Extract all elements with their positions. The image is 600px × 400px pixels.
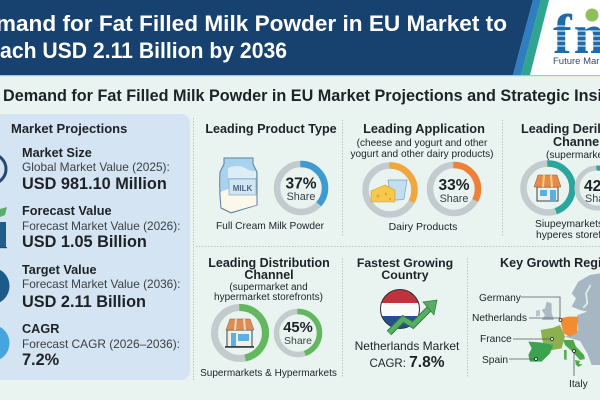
panel heading: Market Projections <box>11 121 127 136</box>
title <box>0 11 507 63</box>
caption: Dairy Products <box>389 221 457 233</box>
metric: CAGR <box>22 322 180 369</box>
heading: Fastest Growing <box>357 256 453 270</box>
donut chart: 33% share: 33% <box>438 177 470 194</box>
heading: Leading Application <box>363 121 485 136</box>
caption: Full Cream Milk Powder <box>216 221 325 232</box>
icon: market size ring <box>0 154 6 184</box>
donut chart: 42% share <box>577 168 600 208</box>
icon: store donut <box>524 164 572 212</box>
donut chart: 33% share <box>430 165 478 213</box>
metric: market size <box>22 146 170 193</box>
metric: target value <box>22 263 180 311</box>
metric: forecast value: Forecast Market Value (2026): <box>22 219 180 233</box>
caption: Netherlands Market <box>355 339 460 353</box>
panel: leading distribution channel <box>200 256 337 379</box>
label: Germany: Germany <box>479 293 522 304</box>
label: Italy: Italy <box>569 379 589 390</box>
icon: milk bag: MILK <box>233 184 252 193</box>
metric: target value: Target Value <box>22 263 97 277</box>
metric: market size: Global Market Value (2025): <box>22 160 170 174</box>
donut chart: 37% share: Share <box>287 191 315 203</box>
stat: CAGR 7.8%: CAGR: 7.8% <box>370 354 445 371</box>
metric: forecast value: Forecast Value <box>22 204 112 218</box>
donut chart: 37% share: 37% <box>285 176 317 192</box>
metric: CAGR: CAGR <box>22 322 59 336</box>
panel: leading product type <box>205 122 337 232</box>
metric: CAGR: 7.2% <box>22 351 60 369</box>
panel: leading application <box>350 121 494 233</box>
metric: CAGR: Forecast CAGR (2026–2036): <box>22 337 180 351</box>
donut chart: 45% share: Share <box>284 335 312 347</box>
metric: forecast value: USD 1.05 Billion <box>22 233 147 251</box>
metric: target value: Forecast Market Value (2036): <box>22 277 180 291</box>
metric: market size: USD 981.10 Million <box>22 175 167 193</box>
panel: fastest growing country: Country <box>381 268 429 282</box>
icon: target circle <box>0 268 10 304</box>
metric: market size: Market Size <box>22 146 92 160</box>
panel: fastest growing country <box>355 256 460 371</box>
heading: Leading Distribution <box>208 256 330 270</box>
label: Spain: Spain <box>482 355 508 366</box>
icon: CAGR circle <box>0 324 10 362</box>
callout lines <box>509 297 574 376</box>
callout markers <box>534 318 576 360</box>
panel: leading derived channel <box>521 122 600 241</box>
panel: leading application: yogurt and other dairy products) <box>350 149 494 160</box>
panel: market projections <box>0 114 190 380</box>
donut chart: 45% share: 45% <box>283 320 313 336</box>
metric: forecast value <box>22 204 180 251</box>
donut chart: 33% share: Share <box>440 193 468 205</box>
heading: Leading Product Type <box>205 122 337 136</box>
caption: Supermarkets & Hypermarkets <box>200 368 337 379</box>
panel: key growth regions <box>472 256 600 390</box>
description: (supermarket and <box>229 282 308 293</box>
panel: leading distribution channel: Channel <box>244 268 294 282</box>
donut chart: 45% share <box>276 312 320 354</box>
label: Netherlands: Netherlands <box>472 313 527 324</box>
icon: Netherlands flag with arrow <box>380 289 437 333</box>
icon: forecast bars <box>0 207 7 248</box>
icon: dairy donut <box>366 166 414 214</box>
label: France: France <box>480 334 512 345</box>
donut chart: 37% share <box>277 164 325 212</box>
icon: store donut <box>214 308 266 358</box>
panel: leading distribution channel: hypermarket storefronts) <box>214 292 323 303</box>
header banner <box>0 0 600 76</box>
description: (cheese and yogurt and other <box>357 138 488 149</box>
metric: target value: USD 2.11 Billion <box>22 293 146 311</box>
map of Europe <box>528 273 600 367</box>
